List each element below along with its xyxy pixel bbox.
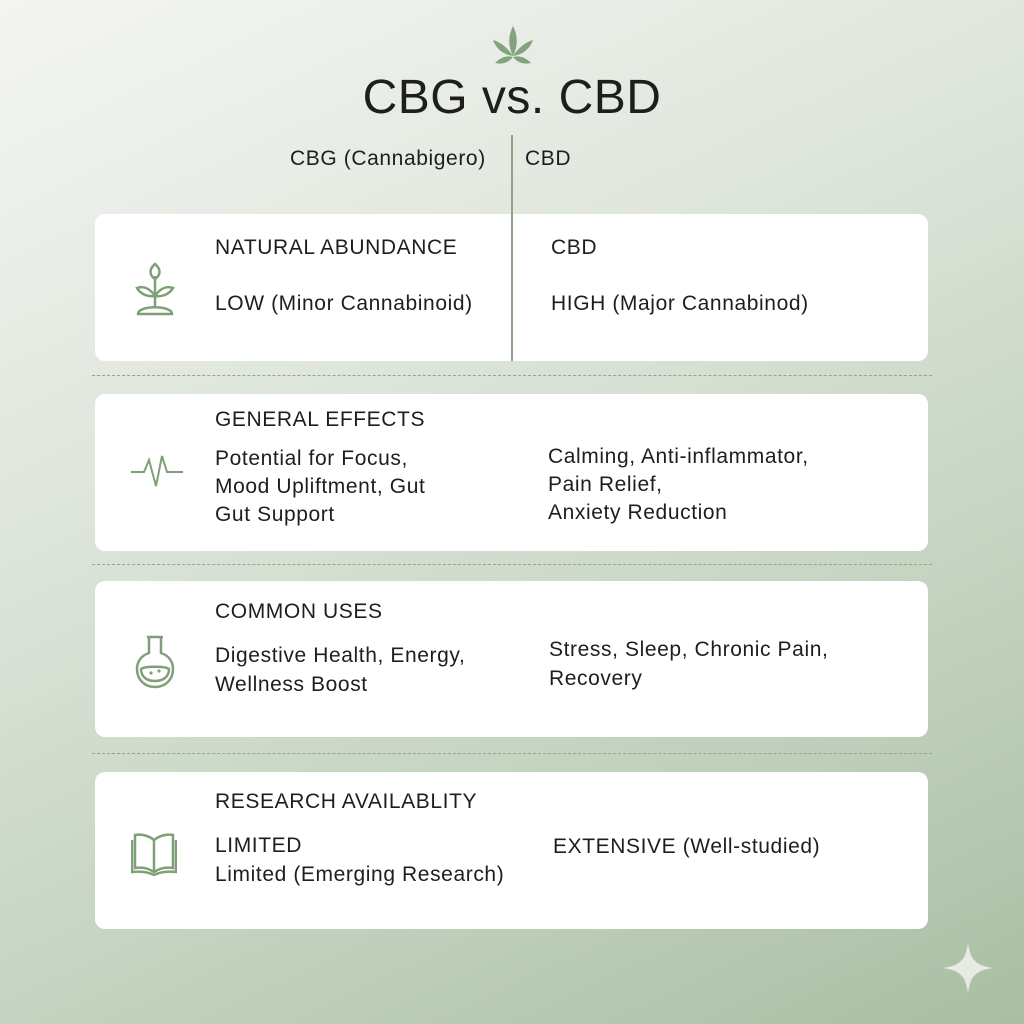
panel: common uses: Digestive Health, Energy, [215,644,465,667]
panel: general effects: Pain Relief, [548,473,663,496]
panel: common uses: Wellness Boost [215,673,368,696]
title: CBG vs. CBD [363,71,661,124]
panel: research availability: LIMITED [215,834,302,857]
panel: common uses: Recovery [549,667,642,690]
panel: research availability: RESEARCH AVAILABLITY [215,790,477,813]
column header CBD: CBD [525,147,571,170]
divider vertical line [511,135,513,361]
panel: research availability: Limited (Emerging Research) [215,863,504,886]
panel: common uses: Stress, Sleep, Chronic Pain, [549,638,828,661]
panel: research availability [95,772,928,929]
column header CBG: CBG (Cannabigero) [290,147,486,170]
icon: flask [136,636,174,688]
panel: general effects: GENERAL EFFECTS [215,408,425,431]
panel: common uses [95,581,928,737]
panel: natural abundance [95,214,928,361]
panel: general effects: Mood Upliftment, Gut [215,475,425,498]
panel: natural abundance: LOW (Minor Cannabinoid) [215,292,473,315]
panel: natural abundance: CBD [551,236,597,259]
panel: general effects: Gut Support [215,503,335,526]
icon: book [131,833,177,876]
panel: general effects: Calming, Anti-inflammator, [548,445,809,468]
panel: natural abundance: HIGH (Major Cannabinod) [551,292,809,315]
panel: natural abundance: NATURAL ABUNDANCE [215,236,457,259]
icon: sparkle [942,942,994,994]
icon: cannabis leaf [493,26,533,64]
panel: general effects [95,394,928,551]
panel: general effects: Potential for Focus, [215,447,408,470]
panel: general effects: Anxiety Reduction [548,501,727,524]
icon: pulse [131,456,183,486]
icon: sprout [135,262,175,316]
panel: research availability: EXTENSIVE (Well-studied) [553,835,820,858]
panel: common uses: COMMON USES [215,600,383,623]
